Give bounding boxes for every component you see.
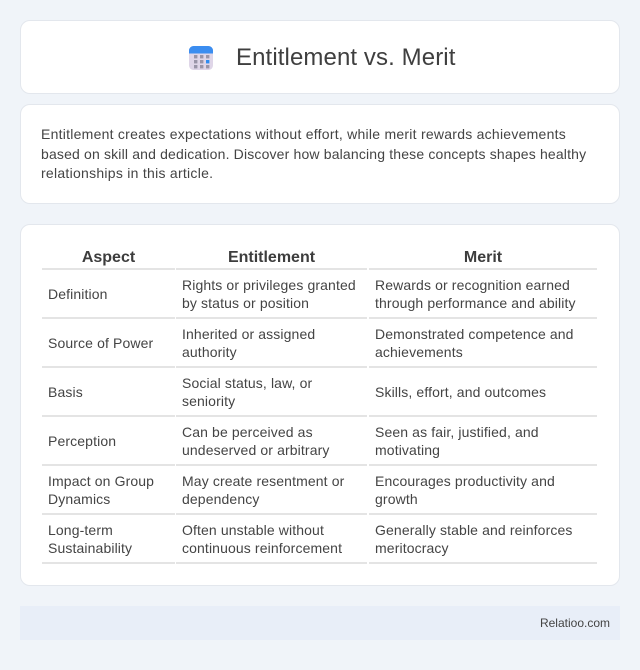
title: Entitlement vs. Merit bbox=[236, 44, 456, 71]
Impact merit bbox=[375, 473, 555, 507]
Impact merit: growth bbox=[375, 491, 418, 507]
column heading: Aspect: Aspect bbox=[82, 249, 135, 266]
row: Long-term Sustainability: Long-term bbox=[48, 522, 113, 538]
Impact entitlement: dependency bbox=[182, 491, 260, 507]
footer credit: Relatioo.com bbox=[540, 616, 610, 630]
row: Impact on Group Dynamics: Dynamics bbox=[48, 491, 110, 507]
icon: calendar bbox=[189, 46, 213, 70]
intro paragraph: based on skill and dedication. Discover how balancing these concepts shapes healthy bbox=[41, 146, 586, 162]
Source merit: Demonstrated competence and bbox=[375, 326, 574, 342]
Perception entitlement: Can be perceived as bbox=[182, 424, 313, 440]
Source entitlement: Inherited or assigned bbox=[182, 326, 315, 342]
Definition merit: through performance and ability bbox=[375, 295, 576, 311]
Definition entitlement: Rights or privileges granted bbox=[182, 277, 356, 293]
Sustainability merit: meritocracy bbox=[375, 540, 449, 556]
intro paragraph: relationships in this article. bbox=[41, 165, 213, 181]
table card bbox=[20, 224, 620, 586]
Sustainability entitlement: continuous reinforcement bbox=[182, 540, 342, 556]
Source entitlement: authority bbox=[182, 344, 237, 360]
column heading: Entitlement: Entitlement bbox=[228, 249, 315, 266]
row: Source of Power: Source of Power bbox=[48, 335, 153, 351]
Basis entitlement: seniority bbox=[182, 393, 235, 409]
Definition entitlement: by status or position bbox=[182, 295, 309, 311]
Perception merit: Seen as fair, justified, and bbox=[375, 424, 539, 440]
Sustainability merit bbox=[375, 522, 572, 556]
Source merit: achievements bbox=[375, 344, 463, 360]
row: Basis: Basis bbox=[48, 384, 83, 400]
intro paragraph: Entitlement creates expectations without effort, while merit rewards achievements bbox=[41, 126, 566, 142]
Impact merit: Encourages productivity and bbox=[375, 473, 555, 489]
row: Long-term Sustainability bbox=[48, 522, 132, 556]
Basis merit: Skills, effort, and outcomes bbox=[375, 384, 546, 400]
intro paragraph bbox=[41, 126, 586, 181]
Definition merit bbox=[375, 277, 576, 311]
Perception merit: motivating bbox=[375, 442, 440, 458]
Sustainability entitlement bbox=[182, 522, 342, 556]
row: Perception: Perception bbox=[48, 433, 116, 449]
row: Long-term Sustainability: Sustainability bbox=[48, 540, 132, 556]
Perception merit bbox=[375, 424, 539, 458]
Sustainability entitlement: Often unstable without bbox=[182, 522, 324, 538]
row: Definition: Definition bbox=[48, 286, 108, 302]
row: Impact on Group Dynamics bbox=[48, 473, 154, 507]
Perception entitlement: undeserved or arbitrary bbox=[182, 442, 330, 458]
Source entitlement bbox=[182, 326, 315, 360]
Perception entitlement bbox=[182, 424, 330, 458]
intro text card bbox=[20, 104, 620, 204]
Source merit bbox=[375, 326, 574, 360]
Impact entitlement: May create resentment or bbox=[182, 473, 344, 489]
Impact entitlement bbox=[182, 473, 344, 507]
column heading: Merit: Merit bbox=[464, 249, 502, 266]
Definition entitlement bbox=[182, 277, 356, 311]
footer bar bbox=[20, 606, 620, 640]
row: Impact on Group Dynamics: Impact on Group bbox=[48, 473, 154, 489]
Basis entitlement bbox=[182, 375, 312, 409]
Basis entitlement: Social status, law, or bbox=[182, 375, 312, 391]
Definition merit: Rewards or recognition earned bbox=[375, 277, 570, 293]
Sustainability merit: Generally stable and reinforces bbox=[375, 522, 572, 538]
header card bbox=[20, 20, 620, 94]
